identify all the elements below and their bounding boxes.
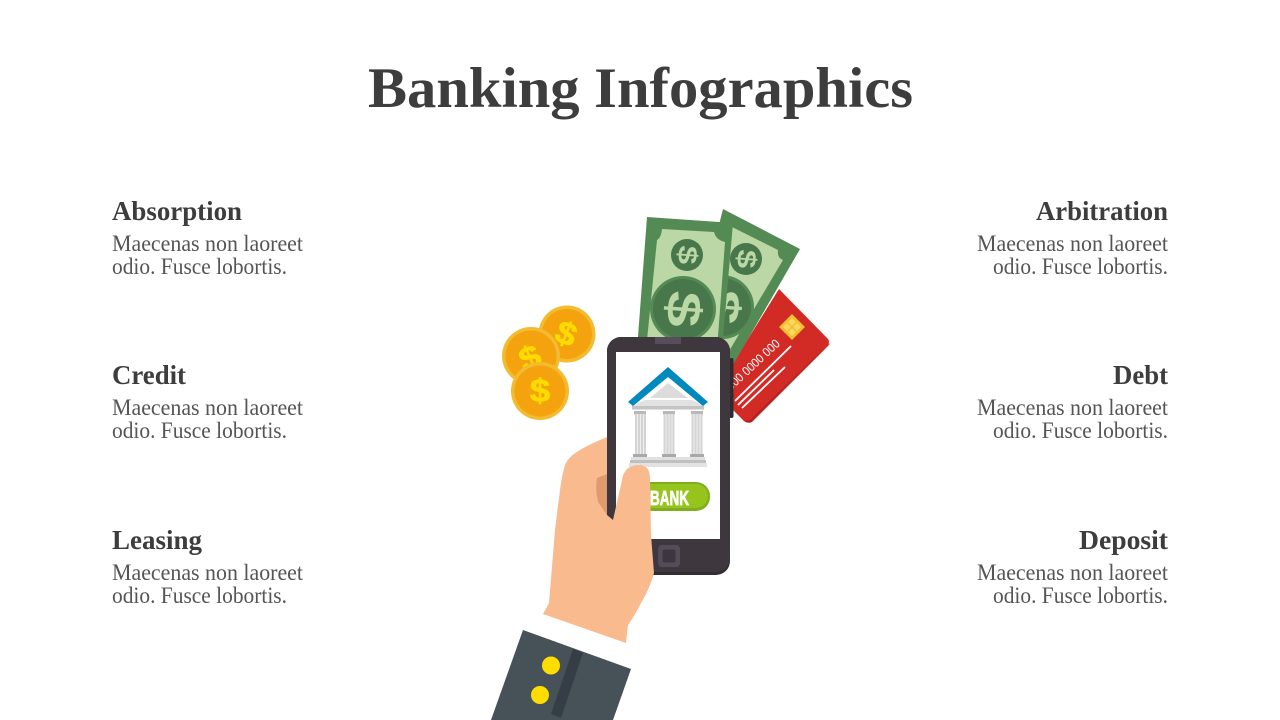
text block: Debt: odio. Fusce lobortis. [993,418,1168,443]
icon: back banknote: $ [696,288,751,327]
icon: coins [502,306,596,420]
text block: Credit: Maecenas non laoreet [112,395,304,420]
text block: Absorption: odio. Fusce lobortis. [112,254,287,279]
icon: front banknote: $ [672,245,703,265]
card number: 000 0000 000 [723,337,783,393]
text block: Deposit [977,525,1169,608]
icon: back banknote: $ [731,249,762,269]
text block: Arbitration [977,196,1169,279]
text block: Leasing: Leasing [112,525,202,555]
text block: Debt: Maecenas non laoreet [977,395,1169,420]
text block: Absorption: Maecenas non laoreet [112,231,304,256]
text block: Deposit: Deposit [1079,525,1168,555]
button: BANK: BANK [650,488,689,510]
text block: Credit: odio. Fusce lobortis. [112,418,287,443]
sleeve buttons [542,656,560,674]
button: BANK [625,482,710,511]
text block: Leasing [112,525,304,608]
icon: front banknote [637,217,733,350]
icon: card chip [779,314,805,340]
text block: Deposit: odio. Fusce lobortis. [993,583,1168,608]
icon: back banknote [690,209,800,365]
illustration: hand holding phone with bank app, cash, card and coins [491,209,830,720]
icon: bank building [628,367,708,467]
icon: credit card [715,289,830,423]
text block: Debt [977,360,1169,443]
icon: suit sleeve [491,630,631,720]
text block: Leasing: Maecenas non laoreet [112,560,304,585]
title: Banking Infographics [368,57,913,120]
icon: coins: $ [530,374,550,409]
icon: coins: $ [550,314,582,354]
text block: Credit [112,360,304,443]
text block: Debt: Debt [1113,360,1168,390]
text block: Deposit: Maecenas non laoreet [977,560,1169,585]
text block: Arbitration: odio. Fusce lobortis. [993,254,1168,279]
card stripes [735,346,791,408]
icon: coins: $ [514,338,547,379]
text block: Absorption [112,196,304,279]
text block: Arbitration: Arbitration [1036,196,1168,226]
text block: Credit: Credit [112,360,186,390]
icon: front banknote: $ [655,289,712,329]
icon: hand [543,437,654,643]
text block: Absorption: Absorption [112,196,242,226]
text block: Leasing: odio. Fusce lobortis. [112,583,287,608]
text block: Arbitration: Maecenas non laoreet [977,231,1169,256]
icon: smartphone [607,337,734,575]
